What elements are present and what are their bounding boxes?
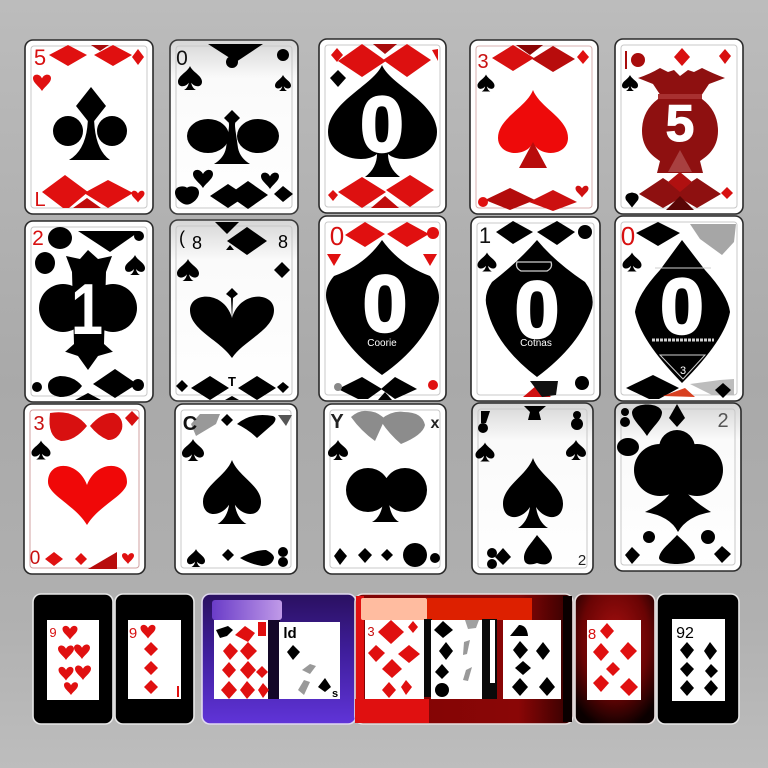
zero: 0 xyxy=(515,265,559,354)
corner mark right: x xyxy=(431,415,440,432)
corner numeral: 8 xyxy=(588,626,596,643)
top shapes xyxy=(183,413,292,438)
small spades xyxy=(476,440,586,462)
bright red section xyxy=(355,699,429,723)
top bright band xyxy=(427,598,532,620)
top diamonds xyxy=(492,45,589,72)
small spades xyxy=(177,259,290,281)
card row 3 column 5: large black club xyxy=(615,403,741,571)
light tab xyxy=(212,600,282,620)
bottom row: 0 xyxy=(30,548,40,569)
card row 2 column 5: black diamond zero with grey fold xyxy=(615,216,743,401)
five: 5 xyxy=(666,95,694,153)
corner numeral: 0 xyxy=(176,47,188,70)
small spade xyxy=(32,440,50,460)
corner mark xyxy=(625,51,645,69)
corner numeral: 9 xyxy=(129,625,137,642)
top leaves xyxy=(49,411,139,441)
bottom suits xyxy=(175,170,293,209)
small three: 3 xyxy=(680,365,686,377)
caption: Cotnas xyxy=(520,338,552,349)
center spade xyxy=(203,460,261,524)
top shapes xyxy=(178,44,291,91)
center spade xyxy=(328,65,437,177)
corner numeral: 9 xyxy=(49,625,57,640)
caption: Coorie xyxy=(367,338,397,349)
corner text: ld xyxy=(283,625,297,642)
middle white card xyxy=(431,620,482,699)
card row 1 column 3: big spade with zero xyxy=(319,39,446,213)
black mark xyxy=(216,626,233,638)
vase xyxy=(638,68,725,173)
center red spade xyxy=(498,90,568,168)
center heart with pip xyxy=(190,288,274,358)
bottom diamonds xyxy=(42,175,133,208)
right card suits xyxy=(287,645,331,695)
suits xyxy=(140,625,179,697)
black strips xyxy=(424,619,497,699)
card row 1 column 4: red spade xyxy=(470,40,598,214)
panel: black card with red diamonds xyxy=(115,594,194,724)
top shapes: C xyxy=(183,413,197,435)
band emblem xyxy=(516,262,552,271)
bottom shapes xyxy=(176,374,289,400)
bottom shapes xyxy=(523,376,589,397)
corner numeral: 3 xyxy=(477,51,489,73)
left card diamonds xyxy=(368,620,420,698)
bottom shapes xyxy=(334,377,438,400)
small bottom spade xyxy=(625,192,639,208)
bottom shapes xyxy=(626,375,734,399)
corner numeral: 1 xyxy=(479,223,491,248)
hearts xyxy=(58,626,91,695)
top diamonds xyxy=(674,48,731,66)
top diamond xyxy=(215,222,267,255)
card row 2 column 3: black diamond zero xyxy=(319,216,446,401)
black edge xyxy=(563,596,572,722)
sliver xyxy=(490,620,495,683)
center rounded diamond xyxy=(326,240,439,375)
bottom shapes xyxy=(625,530,731,564)
top shapes xyxy=(622,222,736,272)
center club xyxy=(634,430,723,532)
corner marks: 8 xyxy=(192,233,202,253)
bottom diamonds xyxy=(639,172,733,210)
white card xyxy=(587,620,641,700)
bottom corner numeral: L xyxy=(34,189,46,211)
corner numeral: 5 xyxy=(34,45,46,70)
center club xyxy=(39,250,137,370)
bottom shapes xyxy=(187,547,288,567)
card row 3 column 2: black spade xyxy=(175,404,297,574)
top diamonds xyxy=(331,44,438,77)
bottom diamonds xyxy=(328,175,434,208)
card row 3 column 3: black club xyxy=(324,404,446,574)
small letter: s xyxy=(332,688,338,700)
small spade xyxy=(478,74,494,92)
panel: red with three cards xyxy=(355,594,573,724)
center club xyxy=(53,87,127,160)
card row 3 column 1: red heart xyxy=(24,404,145,574)
card row 2 column 1: black club with one xyxy=(25,221,153,402)
corner numeral: 2 xyxy=(32,227,44,250)
corner mark: 0 xyxy=(621,221,635,251)
center club xyxy=(346,468,427,522)
middle card suits xyxy=(434,620,479,697)
card row 2 column 4: black diamond zero with band xyxy=(471,217,600,401)
panel: black card with black spades xyxy=(657,594,739,724)
bottom shapes xyxy=(32,369,144,400)
card row 3 column 4: black spade xyxy=(472,403,593,574)
bottom numeral: 2 xyxy=(578,552,586,569)
small spade xyxy=(328,440,348,460)
dark strip xyxy=(268,620,280,699)
corner marks xyxy=(179,228,288,253)
small spade xyxy=(622,75,638,91)
right white card xyxy=(279,622,340,699)
top shapes xyxy=(478,406,583,433)
bottom shapes xyxy=(334,543,440,567)
center rounded diamond xyxy=(635,240,730,383)
panel: purple with two cards xyxy=(202,594,356,724)
corner marks: 8 xyxy=(278,232,288,252)
lower shape detail xyxy=(668,150,692,172)
corner numeral: 3 xyxy=(367,624,375,639)
top shapes xyxy=(35,227,145,275)
bottom row xyxy=(30,548,134,569)
corner mark: Y xyxy=(330,411,344,433)
center club xyxy=(187,110,279,164)
card row 1 column 1: club with red diamonds xyxy=(25,40,153,214)
top diamonds xyxy=(49,45,144,66)
center rounded diamond xyxy=(486,240,593,377)
card row 2 column 2: black heart xyxy=(170,220,298,401)
corner numerals: 92 xyxy=(676,625,694,642)
card row 1 column 2: black club xyxy=(170,40,298,214)
corner mark: 0 xyxy=(330,221,344,251)
corner marks: ( xyxy=(179,228,185,248)
white card xyxy=(672,619,725,701)
panel: black card with red hearts xyxy=(33,594,113,724)
decorative bands xyxy=(652,268,714,379)
white card xyxy=(47,620,99,700)
pale tab xyxy=(361,598,427,620)
small heart xyxy=(33,75,51,91)
zero: 0 xyxy=(363,259,407,348)
spades xyxy=(680,642,718,696)
right card spades xyxy=(510,625,555,696)
bottom shapes xyxy=(487,535,552,569)
numeral one: 1 xyxy=(71,269,103,349)
small spade xyxy=(182,439,204,461)
small diamond xyxy=(330,70,346,87)
zero: 0 xyxy=(360,80,404,168)
corner numeral: 2 xyxy=(717,410,729,432)
zero: 0 xyxy=(660,262,704,350)
center heart xyxy=(48,466,127,525)
card row 1 column 5: vase with five xyxy=(615,39,743,214)
bottom shapes: T xyxy=(228,374,236,389)
bottom diamonds xyxy=(478,186,588,211)
small bottom heart xyxy=(132,191,144,202)
grey hearts xyxy=(351,411,425,444)
left card diamonds xyxy=(221,622,269,699)
panel: dark red card with diamonds xyxy=(575,594,655,724)
left white card xyxy=(365,620,424,699)
white card xyxy=(128,620,181,699)
top shapes xyxy=(478,221,592,272)
diamonds xyxy=(593,623,638,696)
top shapes xyxy=(617,404,685,456)
right white card xyxy=(503,620,561,699)
center spade xyxy=(503,458,563,528)
left white card xyxy=(214,620,268,699)
top red shapes xyxy=(327,222,439,266)
corner numeral: 3 xyxy=(33,413,45,435)
